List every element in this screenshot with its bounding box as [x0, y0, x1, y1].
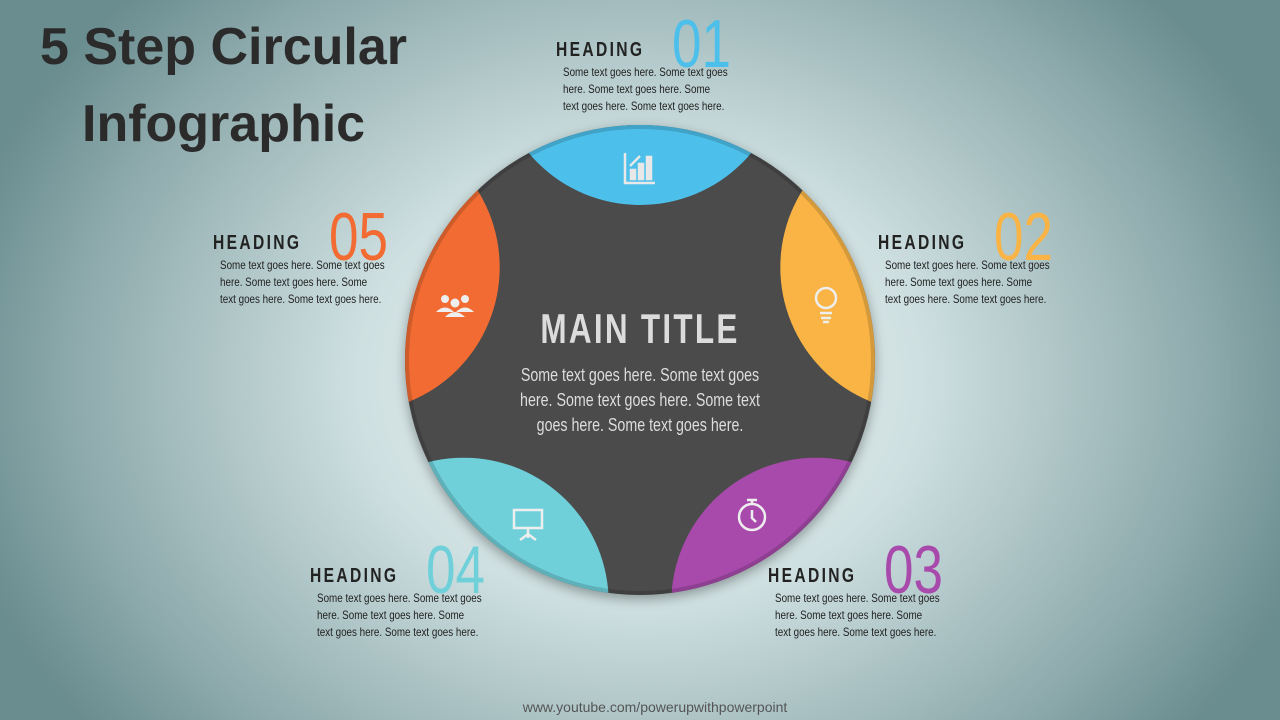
step 04: Some text goes here. Some text goes	[317, 591, 482, 605]
segment 4	[428, 458, 608, 593]
step 05: here. Some text goes here. Some	[220, 275, 367, 289]
title: 5 Step Circular	[40, 18, 407, 76]
main text: Some text goes here. Some text goes	[521, 364, 759, 385]
segment 2	[780, 190, 875, 402]
step 03: Some text goes here. Some text goes	[775, 591, 940, 605]
step 01: Some text goes here. Some text goes	[563, 65, 728, 79]
step 03: text goes here. Some text goes here.	[775, 625, 936, 639]
step 01: 01	[672, 6, 731, 82]
icon: bulb	[816, 288, 836, 322]
step 02: Some text goes here. Some text goes	[885, 258, 1050, 272]
step 02: text goes here. Some text goes here.	[885, 292, 1046, 306]
icon: chart	[625, 153, 655, 183]
step 04: 04	[426, 532, 485, 608]
segment 3	[672, 458, 852, 593]
step 03: here. Some text goes here. Some	[775, 608, 922, 622]
icon: presentation	[514, 510, 542, 540]
segment 1	[528, 125, 752, 205]
step 05: Some text goes here. Some text goes	[220, 258, 385, 272]
step 01	[556, 6, 731, 113]
step 03	[768, 532, 943, 639]
step 05: HEADING	[213, 232, 301, 254]
step 02: 02	[994, 199, 1053, 275]
step 04	[310, 532, 485, 639]
step 01: here. Some text goes here. Some	[563, 82, 710, 96]
step 03: HEADING	[768, 565, 856, 587]
step 05	[213, 199, 388, 306]
step 04: text goes here. Some text goes here.	[317, 625, 478, 639]
step 01: HEADING	[556, 39, 644, 61]
icon: people	[436, 295, 474, 317]
main text: goes here. Some text goes here.	[537, 414, 743, 435]
step 05: 05	[329, 199, 388, 275]
step 02: here. Some text goes here. Some	[885, 275, 1032, 289]
title	[40, 18, 407, 153]
icon: stopwatch	[739, 500, 765, 530]
main text: here. Some text goes here. Some text	[520, 389, 760, 410]
step 01: text goes here. Some text goes here.	[563, 99, 724, 113]
segment 5	[405, 190, 500, 402]
main text	[520, 364, 760, 435]
step 04: HEADING	[310, 565, 398, 587]
main title: MAIN TITLE	[540, 305, 740, 352]
step 02	[878, 199, 1053, 306]
step 04: here. Some text goes here. Some	[317, 608, 464, 622]
title: Infographic	[82, 95, 365, 153]
circular diagram	[398, 122, 882, 606]
footer url: www.youtube.com/powerupwithpowerpoint	[523, 699, 787, 715]
step 03: 03	[884, 532, 943, 608]
step 02: HEADING	[878, 232, 966, 254]
step 05: text goes here. Some text goes here.	[220, 292, 381, 306]
